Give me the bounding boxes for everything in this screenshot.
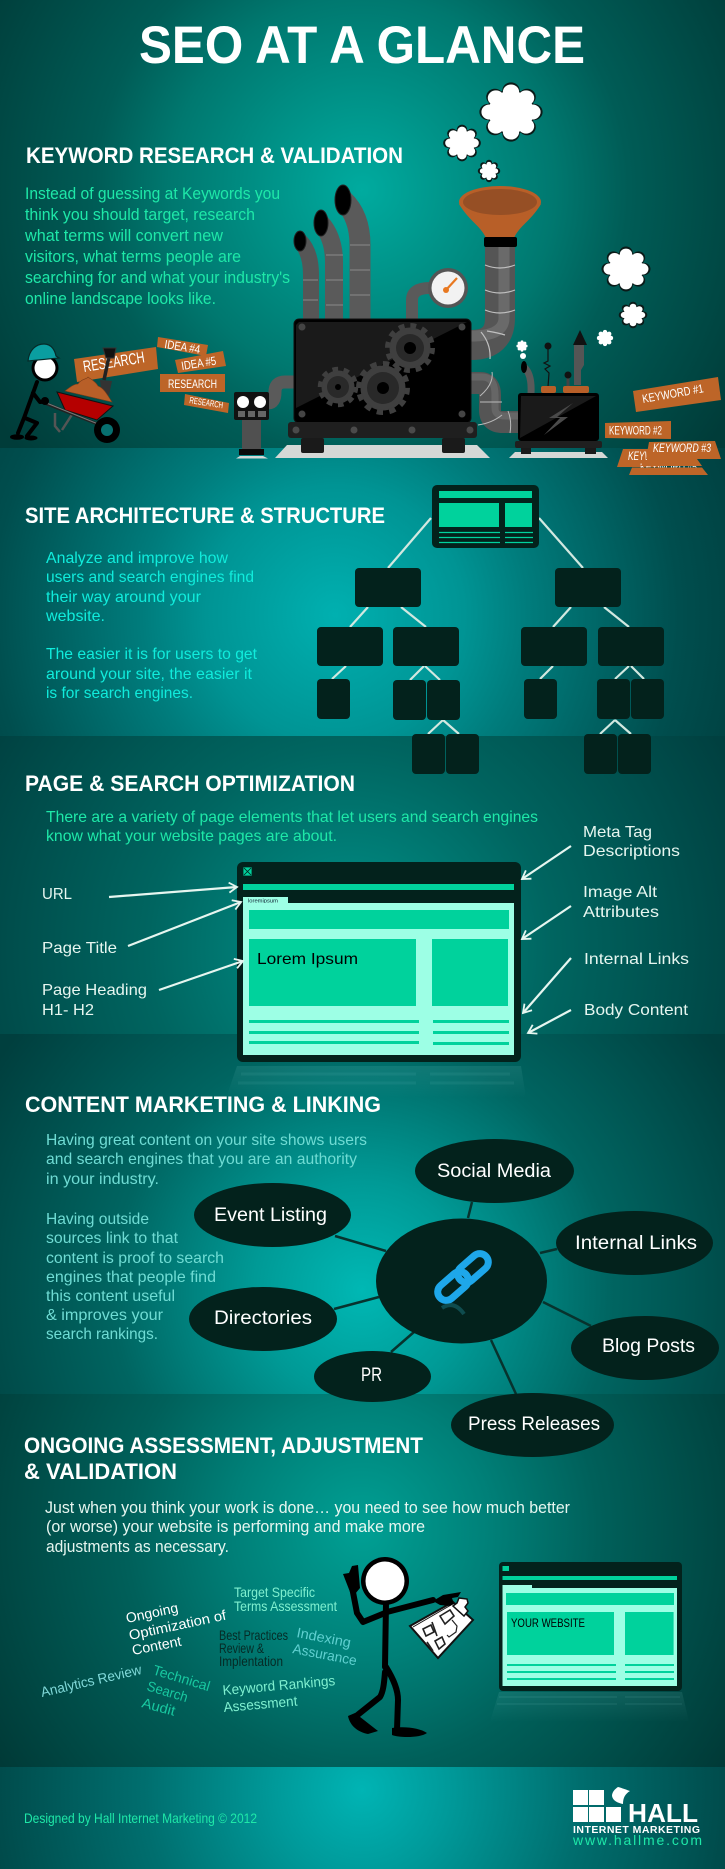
floor plates <box>236 438 608 458</box>
diagram: blog posts node: Blog Posts <box>602 1336 695 1357</box>
word cloud: assessment activities: Target Specific <box>234 1584 315 1600</box>
word cloud: assessment activities <box>39 1584 358 1719</box>
title: SEO AT A GLANCE <box>139 16 585 75</box>
text block: site architecture: website. <box>45 608 105 625</box>
panel: keyword research <box>10 82 721 475</box>
chart: site tree connectors <box>332 518 644 734</box>
word cloud: assessment activities: Implentation <box>219 1653 283 1669</box>
diagram: press releases node <box>451 1393 614 1457</box>
word cloud: assessment activities: Optimization of <box>127 1607 228 1643</box>
icon: main machine with gears <box>288 319 477 438</box>
diagram: event listing node <box>194 1183 351 1247</box>
label: keyword 4: KEYWORD #4 <box>628 449 682 463</box>
word cloud: assessment activities: Technical <box>151 1662 212 1694</box>
text block: content marketing: engines that people find <box>46 1269 216 1286</box>
text block: content marketing: sources link to that <box>46 1230 179 1247</box>
footer credit: Designed by Hall Internet Marketing © 2012 <box>24 1810 257 1826</box>
panel: ongoing assessment <box>24 1433 689 1737</box>
text block: content marketing: Having outside <box>46 1211 149 1228</box>
panel background: ongoing assessment band <box>0 1394 725 1767</box>
icon: worker with wheelbarrow <box>10 344 120 443</box>
panel: content marketing <box>25 1092 719 1457</box>
labels: left callouts: Page Title <box>42 940 117 957</box>
heading: site architecture: SITE ARCHITECTURE & STRUCTURE <box>25 503 385 528</box>
labels: right callouts <box>583 824 689 1019</box>
panel background: keyword research band <box>0 0 725 448</box>
page tab: loremipsum <box>248 898 278 904</box>
label: keyword 1: KEYWORD #1 <box>641 381 705 406</box>
diagram: directories node <box>189 1287 337 1351</box>
text block: site architecture: Analyze and improve how <box>46 550 228 567</box>
text block: content marketing: and search engines that you are an authority <box>46 1151 357 1168</box>
diagram: social media node <box>415 1139 574 1203</box>
browser window: your website: YOUR WEBSITE <box>511 1616 585 1630</box>
page tab <box>243 897 288 904</box>
panel: site architecture <box>25 485 664 774</box>
heading: content marketing: CONTENT MARKETING & LINKING <box>25 1092 381 1117</box>
heading: page optimization: PAGE & SEARCH OPTIMIZATION <box>25 771 355 796</box>
icon: chain link <box>434 1250 492 1314</box>
word cloud: assessment activities: Keyword Rankings <box>222 1672 336 1698</box>
panel background: site architecture band <box>0 448 725 736</box>
logo: hall internet marketing <box>572 1787 702 1848</box>
labels: research ideas <box>74 337 229 413</box>
labels: right callouts: Meta Tag <box>583 824 652 841</box>
text block: content marketing: & improves your <box>46 1307 164 1324</box>
logo: hall internet marketing: INTERNET MARKETING <box>573 1824 700 1836</box>
text block: ongoing assessment: (or worse) your website is performing and make more <box>46 1517 425 1536</box>
icon: control panel <box>234 392 269 455</box>
label: research rectangle: RESEARCH <box>168 377 217 391</box>
text block: site architecture: The easier it is for users to get <box>46 646 258 663</box>
diagram: internal links node: Internal Links <box>575 1233 697 1254</box>
diagram: spokes <box>334 1202 591 1394</box>
word cloud: assessment activities: Search <box>145 1678 190 1705</box>
panel: page optimization <box>25 771 689 1098</box>
heading: ongoing assessment: & VALIDATION <box>24 1459 177 1484</box>
text block: page optimization: There are a variety of page elements that let users and search engines <box>46 809 538 826</box>
labels: right callouts: Body Content <box>584 1002 689 1019</box>
text block: content marketing: this content useful <box>46 1288 175 1305</box>
browser window mockup <box>237 862 521 1062</box>
page content area <box>243 903 514 1055</box>
diagram: pr node: PR <box>361 1365 382 1386</box>
label: research small <box>184 394 229 413</box>
text block: keyword research: think you should target, research <box>25 205 255 224</box>
icon: smoke clouds <box>443 82 650 359</box>
text block: content marketing <box>46 1132 367 1343</box>
text block: page optimization: know what your website pages are about. <box>46 828 337 845</box>
text block: keyword research: Instead of guessing at Keywords you <box>25 184 280 203</box>
diagram: pr node <box>314 1351 431 1402</box>
label: keyword 2: KEYWORD #2 <box>609 424 662 438</box>
chart: site tree nodes <box>317 568 664 774</box>
labels: left callouts: URL <box>42 886 72 903</box>
text block: ongoing assessment <box>45 1498 570 1556</box>
diagram: internal links node <box>556 1211 713 1275</box>
word cloud: assessment activities: Review & <box>219 1640 264 1656</box>
text block: content marketing: search rankings. <box>46 1326 158 1343</box>
text block: keyword research: what terms will convert new <box>24 226 224 245</box>
text block: content marketing: Having great content on your site shows users <box>46 1132 367 1149</box>
heading: ongoing assessment <box>24 1433 424 1484</box>
labels: right callouts: Image Alt <box>583 884 658 901</box>
page content area: Lorem Ipsum <box>257 951 358 968</box>
panel background: content marketing band <box>0 1034 725 1394</box>
logo: hall internet marketing: www.hallme.com <box>572 1832 702 1848</box>
word cloud: assessment activities: Content <box>131 1633 183 1658</box>
text block: keyword research: searching for and what your industry's <box>25 268 290 287</box>
text block: content marketing: in your industry. <box>46 1171 159 1188</box>
text block: ongoing assessment: Just when you think your work is done… you need to see how much better <box>45 1498 570 1517</box>
icon: stick figure with clipboard <box>343 1557 473 1737</box>
icon: favicon <box>243 867 252 876</box>
text block: site architecture: their way around your <box>46 589 202 606</box>
word cloud: assessment activities: Ongoing <box>124 1599 179 1626</box>
label: idea 5: IDEA #5 <box>180 354 217 373</box>
labels: right callouts: Internal Links <box>584 951 689 968</box>
diagram: blog posts node <box>571 1316 719 1380</box>
word cloud: assessment activities: Terms Assessment <box>234 1598 337 1614</box>
word cloud: assessment activities: Assurance <box>291 1640 358 1668</box>
labels: right callouts: Descriptions <box>583 843 680 860</box>
word cloud: assessment activities: Best Practices <box>219 1627 288 1643</box>
logo: hall internet marketing: HALL <box>628 1798 698 1828</box>
heading: keyword research: KEYWORD RESEARCH & VALIDATION <box>26 143 403 168</box>
icon: small generator with lightning <box>515 330 602 454</box>
diagram: directories node: Directories <box>214 1308 312 1329</box>
labels: keywords <box>605 377 721 475</box>
text block: keyword research: visitors, what terms people are <box>25 247 241 266</box>
text block: page optimization <box>46 809 538 845</box>
label: research big <box>74 347 158 382</box>
text block: site architecture <box>45 550 258 702</box>
labels: right callouts: Attributes <box>583 904 659 921</box>
panel background: page optimization band <box>0 736 725 1034</box>
label: research rectangle <box>160 374 225 392</box>
icon: pressure gauge <box>412 268 468 320</box>
panel: footer <box>24 1787 702 1848</box>
arrows: callout pointers <box>109 846 571 1033</box>
labels: left callouts: H1- H2 <box>42 1002 94 1019</box>
text block: keyword research <box>24 184 290 308</box>
heading: ongoing assessment: ONGOING ASSESSMENT, ADJUSTMENT <box>24 1433 424 1458</box>
text block: site architecture: users and search engines find <box>46 569 254 586</box>
word cloud: assessment activities: Assessment <box>223 1693 298 1715</box>
labels: left callouts: Page Heading <box>42 982 147 999</box>
label: keyword 5: KEYWORD #5 <box>640 462 697 472</box>
diagram: event listing node: Event Listing <box>214 1205 327 1226</box>
text block: ongoing assessment: adjustments as necessary. <box>46 1537 229 1556</box>
diagram: press releases node: Press Releases <box>468 1414 600 1435</box>
icon: three exhaust pipes <box>294 185 370 320</box>
browser reflection <box>226 1066 526 1098</box>
icon: funnel and main pipe <box>459 186 541 359</box>
label: research big: RESEARCH <box>82 349 146 376</box>
browser window: your website <box>499 1562 682 1691</box>
text block: site architecture: around your site, the easier it <box>46 666 253 683</box>
chart: site tree root page <box>432 485 539 548</box>
panel background: footer band <box>0 1767 725 1869</box>
url bar <box>243 884 514 890</box>
word cloud: assessment activities: Analytics Review <box>39 1661 144 1700</box>
word cloud: assessment activities: Indexing <box>295 1624 352 1650</box>
icon: connecting pipes <box>268 372 520 433</box>
diagram: social media node: Social Media <box>437 1161 551 1182</box>
label: research small: RESEARCH <box>189 395 224 410</box>
text block: content marketing: content is proof to search <box>46 1250 224 1267</box>
diagram: central hub <box>376 1218 547 1344</box>
label: idea 4: IDEA #4 <box>164 337 202 357</box>
labels: left callouts <box>42 886 147 1019</box>
text block: keyword research: online landscape looks like. <box>25 289 216 308</box>
text block: site architecture: is for search engines. <box>46 685 193 702</box>
browser reflection small <box>490 1692 689 1722</box>
word cloud: assessment activities: Audit <box>140 1694 177 1719</box>
